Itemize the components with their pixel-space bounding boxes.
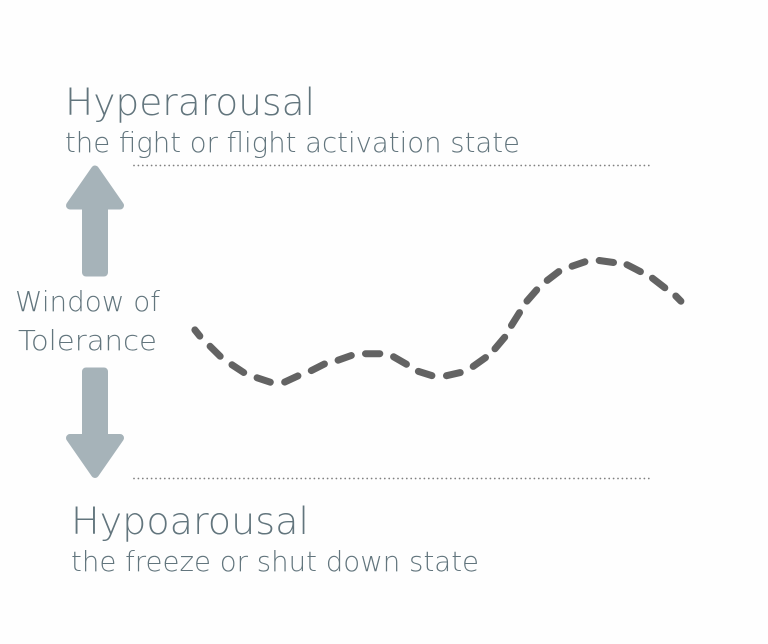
chart: dashed arousal wave xyxy=(195,260,681,382)
heading: hypoarousal: Hypoarousal xyxy=(71,500,309,543)
heading: hyperarousal: Hyperarousal xyxy=(65,81,315,124)
label: window of tolerance: Window of xyxy=(15,285,160,318)
icon: down arrow xyxy=(70,370,120,474)
icon: up arrow xyxy=(70,170,120,274)
label: window of tolerance xyxy=(15,285,160,357)
text: hypoarousal description: the freeze or shut down state xyxy=(71,545,479,578)
label: window of tolerance: Tolerance xyxy=(18,324,157,357)
text: hyperarousal description: the fight or flight activation state xyxy=(65,126,520,159)
